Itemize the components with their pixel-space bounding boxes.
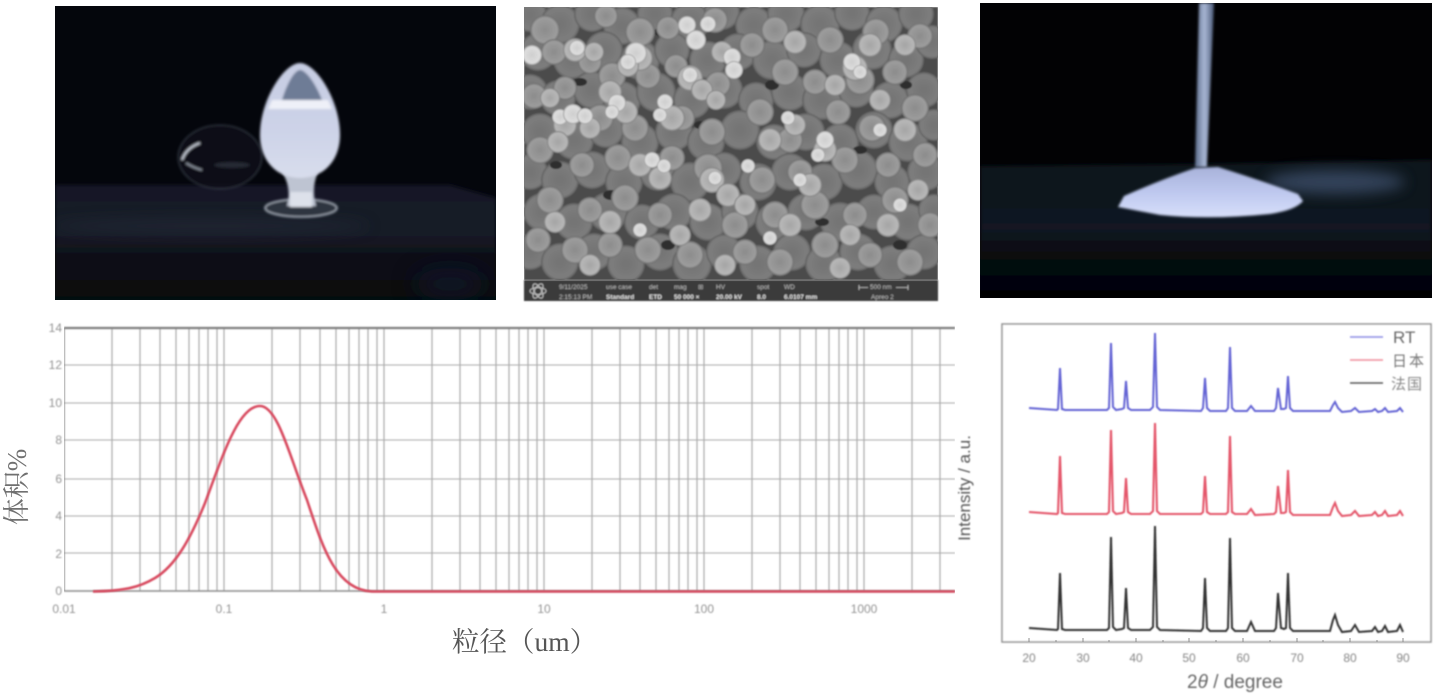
bar background — [524, 280, 938, 301]
black cloth table — [55, 185, 496, 300]
SEM image area — [512, 0, 950, 284]
bar metadata: 9/11/2025 — [559, 284, 588, 291]
legend key: France — [1350, 382, 1383, 384]
chart: XRD patterns — [955, 324, 1431, 693]
x-axis tick labels: 80 — [1343, 651, 1357, 665]
bar metadata: 6.0107 mm — [784, 294, 817, 301]
y-axis tick labels: 12 — [49, 358, 62, 372]
legend — [1350, 328, 1426, 393]
y-axis tick labels: 0 — [55, 584, 62, 598]
bar metadata: det — [649, 284, 658, 291]
x-axis tick labels: 50 — [1182, 651, 1196, 665]
y-axis title: Intensity / a.u. — [955, 435, 974, 541]
x-axis tick labels: 10 — [537, 602, 551, 616]
x-axis tick labels: 70 — [1290, 651, 1304, 665]
flask stem and base — [265, 172, 337, 217]
y-axis tick labels: 8 — [55, 433, 62, 447]
plot frame — [1002, 324, 1431, 642]
bar metadata: use case — [606, 284, 632, 291]
small dark gaps between particles — [550, 28, 912, 259]
scale bar — [859, 285, 908, 290]
falling powder stream — [1195, 3, 1214, 167]
bar metadata — [559, 284, 894, 301]
empty glass flask lying behind — [178, 125, 262, 189]
plot gridlines — [64, 328, 955, 591]
distribution curve — [93, 406, 955, 592]
x-axis tick labels: 60 — [1236, 651, 1250, 665]
legend: 日本 — [1392, 353, 1426, 370]
legend: RT — [1393, 328, 1415, 347]
SEM dark background — [524, 7, 938, 280]
bright particles — [522, 16, 907, 245]
bar metadata: Apreo 2 — [871, 294, 894, 301]
photo: powder pouring into a pile — [980, 3, 1432, 298]
x-axis tick labels — [1022, 651, 1410, 665]
y-axis tick labels: 2 — [55, 547, 62, 561]
SEM information bar — [524, 280, 938, 301]
photo: powder in glass flask — [50, 6, 496, 300]
legend key: RT — [1350, 336, 1383, 338]
table corner glow — [419, 272, 481, 300]
scattered powder glow — [1265, 170, 1405, 194]
powder-filled flask — [260, 63, 340, 178]
x-axis tick labels: 40 — [1129, 651, 1143, 665]
photo: SEM micrograph of particles — [512, 0, 950, 301]
x-axis title: 粒径（um） — [452, 626, 597, 657]
legend: 法国 — [1391, 376, 1423, 393]
x-axis title: 2θ / degree — [1187, 672, 1283, 693]
x-axis tick labels: 1 — [381, 602, 388, 616]
y-axis tick labels: 10 — [49, 396, 62, 410]
bar metadata: spot — [757, 284, 769, 291]
bar metadata: HV — [716, 284, 726, 291]
chart: particle size distribution — [2, 321, 955, 657]
powder pile — [1118, 167, 1303, 217]
y-axis tick labels: 14 — [49, 321, 62, 335]
mid-tone particles — [521, 4, 943, 276]
bar metadata: mag — [674, 284, 687, 291]
bar metadata: 50 000 × — [674, 294, 700, 301]
bar metadata: 20.00 kV — [716, 294, 743, 301]
bar metadata: ⊞ — [698, 284, 704, 291]
atom logo — [530, 282, 546, 300]
x-axis tick labels: 30 — [1076, 651, 1090, 665]
x-axis ticks — [1029, 638, 1403, 642]
x-axis tick labels — [52, 602, 878, 616]
x-axis tick labels: 0.01 — [52, 602, 76, 616]
x-axis tick labels: 0.1 — [216, 602, 233, 616]
x-axis tick labels: 100 — [694, 602, 714, 616]
XRD trace: Japan (red) — [1029, 423, 1403, 516]
background particles — [512, 0, 950, 284]
y-axis tick labels — [49, 321, 62, 598]
bar metadata: Standard — [606, 294, 634, 301]
bar metadata: ETD — [649, 294, 662, 301]
x-axis tick labels: 20 — [1022, 651, 1036, 665]
XRD trace: RT (blue) — [1029, 333, 1403, 412]
x-axis tick labels: 90 — [1396, 651, 1410, 665]
photo background — [55, 6, 496, 300]
legend key: Japan — [1350, 359, 1383, 361]
XRD trace: France (black) — [1029, 526, 1403, 632]
bar metadata: 500 nm — [870, 284, 892, 291]
dark table surface — [980, 160, 1432, 298]
highlight on table — [50, 218, 370, 234]
y-axis tick labels: 6 — [55, 472, 62, 486]
bar metadata: 2:15:13 PM — [559, 294, 592, 301]
y-axis title: 体积% — [2, 449, 32, 525]
photo background — [980, 3, 1432, 298]
lighter particles — [540, 30, 929, 279]
x-axis tick labels: 1000 — [851, 602, 878, 616]
y-axis tick labels: 4 — [55, 509, 62, 523]
bar metadata: WD — [784, 284, 795, 291]
bar metadata: 8.0 — [757, 294, 766, 301]
